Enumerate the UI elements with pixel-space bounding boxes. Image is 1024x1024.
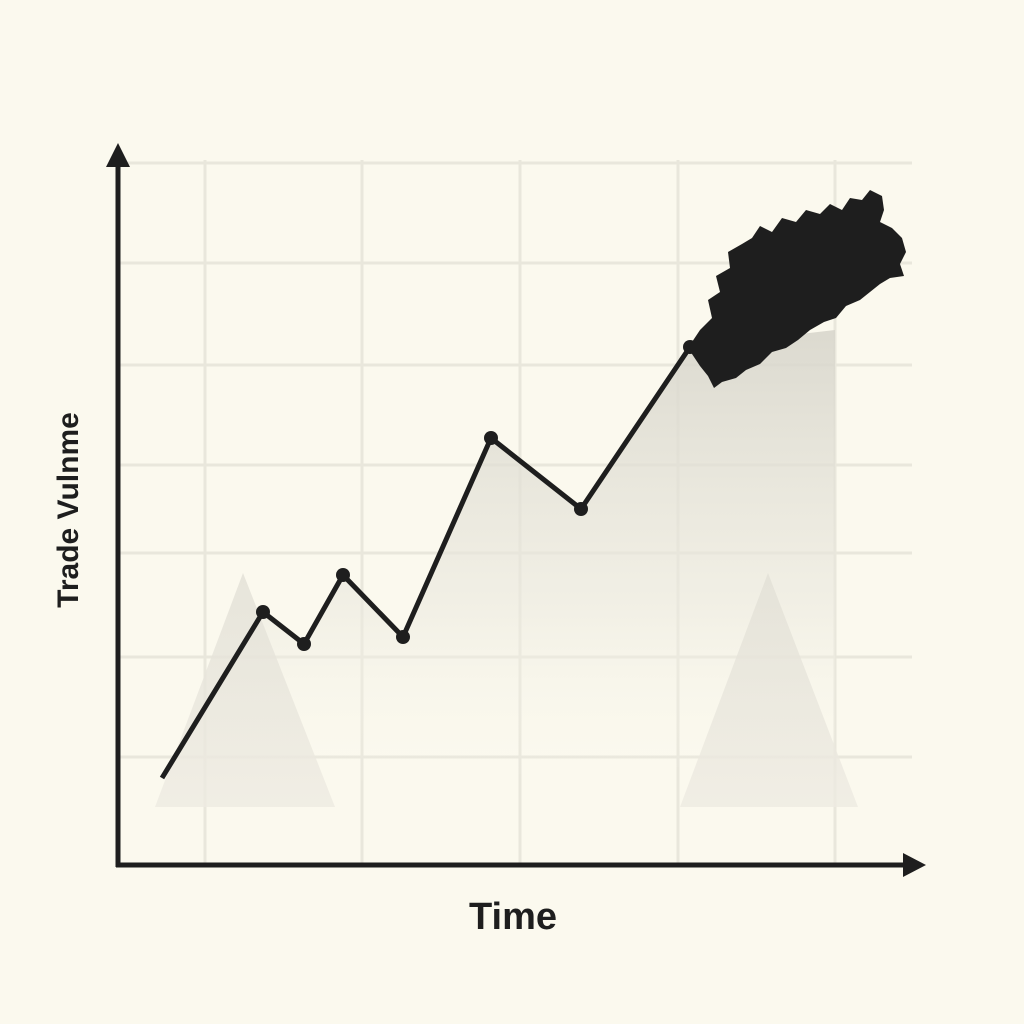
x label: Time bbox=[469, 896, 557, 938]
area fill under line bbox=[162, 330, 835, 790]
triangle right bbox=[680, 573, 858, 807]
axes bbox=[106, 143, 926, 877]
blob bbox=[688, 190, 906, 388]
y label: Trade Vulnme bbox=[52, 412, 85, 608]
line chart bbox=[162, 340, 697, 778]
triangle left bbox=[155, 573, 335, 807]
